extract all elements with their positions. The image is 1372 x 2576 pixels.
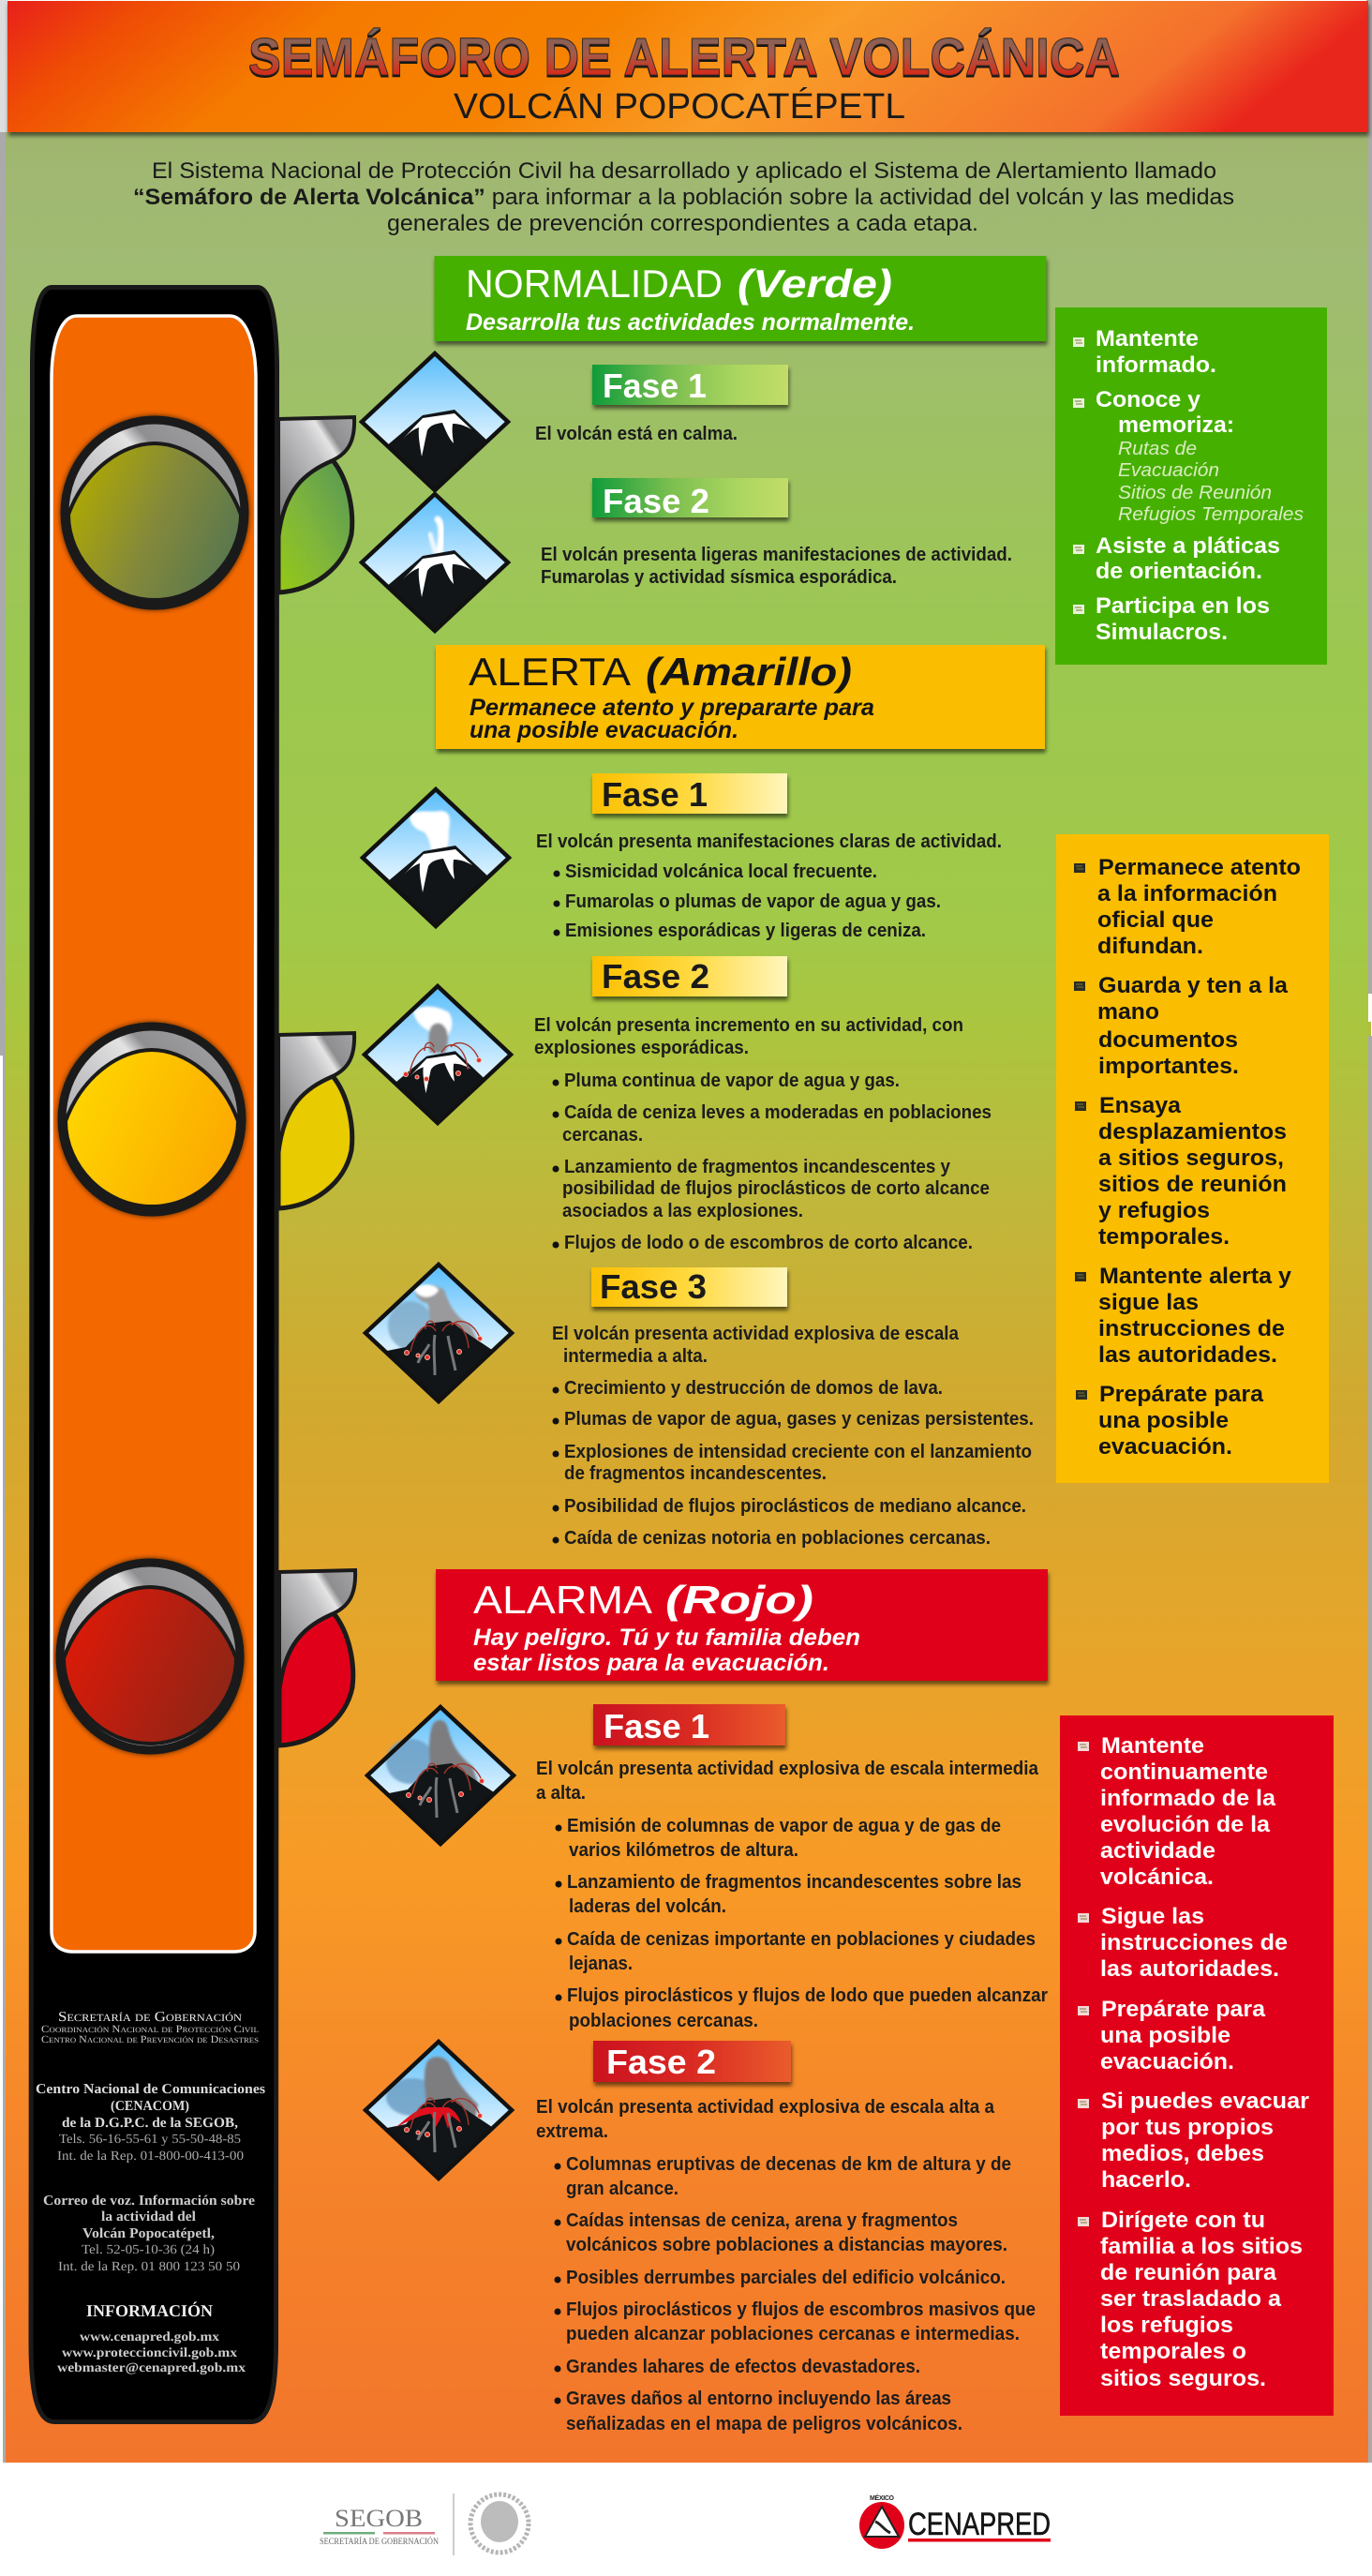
panel: NORMALIDAD heading: NORMALIDAD [466, 262, 723, 306]
logo: CENAPRED [859, 2494, 1051, 2549]
panel: red recommendations [1060, 1715, 1334, 2416]
panel: red recommendations: de reunión para [1100, 2260, 1277, 2285]
panel: red recommendations: sitios seguros. [1100, 2366, 1266, 2391]
panel: yellow recommendations [1056, 834, 1329, 1483]
contact text in traffic light base: Centro Nacional de Comunicaciones [36, 2082, 265, 2097]
panel: red recommendations: ser trasladado a [1100, 2286, 1282, 2312]
subtitle: VOLCÁN POPOCATÉPETL [454, 86, 905, 127]
text: fase 2 amarillo: Caída de ceniza leves a moderadas en poblaciones [564, 1102, 992, 1123]
text: fase 2 amarillo [534, 1015, 992, 1253]
panel: yellow recommendations: Ensaya [1099, 1093, 1182, 1118]
red lamp [60, 1563, 240, 1750]
text: fase 2 amarillo: Flujos de lodo o de escombros de corto alcance. [564, 1233, 973, 1253]
panel: red recommendations: volcánica. [1100, 1865, 1214, 1890]
Fase 1 rojo: Fase 1 [604, 1707, 709, 1745]
Fase 2 amarillo [592, 956, 787, 996]
text: fase 1 rojo: a alta. [536, 1783, 586, 1804]
panel: red recommendations: hacerlo. [1101, 2167, 1191, 2193]
panel: yellow recommendations: documentos [1098, 1027, 1238, 1053]
panel: yellow recommendations: una posible [1098, 1408, 1229, 1433]
panel: NORMALIDAD heading [435, 256, 1046, 341]
text: fase 2 verde: El volcán presenta ligeras manifestaciones de actividad. [541, 545, 1012, 565]
panel: red recommendations: continuamente [1100, 1760, 1268, 1785]
text: fase 2 amarillo: El volcán presenta incremento en su actividad, con [534, 1015, 963, 1036]
traffic light body [31, 287, 277, 2422]
text: fase 1 rojo: lejanas. [569, 1954, 633, 1974]
panel: yellow recommendations: sigue las [1098, 1290, 1199, 1315]
panel: green recommendations: Sitios de Reunión [1118, 483, 1272, 503]
panel: yellow recommendations: las autoridades. [1098, 1342, 1277, 1368]
panel: green recommendations: Rutas de [1118, 439, 1197, 459]
panel: red recommendations: evolución de la [1100, 1812, 1271, 1837]
yellow lamp [62, 1026, 242, 1212]
text: fase 3 amarillo: Crecimiento y destrucción de domos de lava. [564, 1378, 943, 1399]
text: fase 1 rojo: El volcán presenta actividad explosiva de escala intermedia [536, 1759, 1039, 1779]
Fase 1 amarillo: Fase 1 [602, 775, 708, 814]
yellow lamp visor [278, 1033, 354, 1208]
text: fase 1 rojo: Lanzamiento de fragmentos incandescentes sobre las [567, 1872, 1022, 1893]
contact text in traffic light base: Coordinación Nacional de Protección Civil [41, 2024, 259, 2035]
text: fase 3 amarillo: Caída de cenizas notoria en poblaciones cercanas. [564, 1528, 991, 1549]
contact text in traffic light base: Centro Nacional de Prevención de Desastres [41, 2034, 259, 2045]
Fase 2 amarillo: Fase 2 [602, 957, 709, 996]
text: fase 2 rojo: Posibles derrumbes parciales del edificio volcánico. [566, 2268, 1006, 2288]
panel: yellow recommendations: importantes. [1098, 1054, 1239, 1079]
panel: ALERTA heading: (Amarillo) [646, 650, 852, 694]
panel: ALARMA heading [436, 1569, 1048, 1681]
text: fase 2 rojo: Caídas intensas de ceniza, arena y fragmentos [566, 2210, 958, 2231]
text: fase 3 amarillo: Posibilidad de flujos piroclásticos de mediano alcance. [564, 1496, 1026, 1517]
text: fase 2 verde [541, 545, 1012, 588]
logo: SEGOB: SEGOB [335, 2505, 423, 2532]
panel: red recommendations: actividade [1100, 1838, 1215, 1864]
text: fase 2 rojo: El volcán presenta actividad explosiva de escala alta a [536, 2097, 995, 2118]
panel: ALARMA heading: ALARMA [473, 1578, 652, 1622]
contact text in traffic light base [36, 2010, 265, 2375]
red lamp visor [279, 1570, 355, 1745]
panel: green recommendations: Evacuación [1118, 460, 1219, 481]
panel: green recommendations: Simulacros. [1096, 620, 1228, 645]
Fase 1 amarillo [592, 773, 787, 814]
text: fase 1 rojo: Emisión de columnas de vapor de agua y de gas de [567, 1816, 1001, 1836]
text: fase 1 rojo: poblaciones cercanas. [569, 2011, 758, 2031]
icon: volcano with small fumarole, green phase 2 [362, 494, 508, 637]
contact text in traffic light base: Tels. 56-16-55-61 y 55-50-48-85 [59, 2133, 241, 2147]
Fase 2 verde [592, 478, 788, 520]
panel: yellow recommendations: y refugios [1098, 1198, 1210, 1223]
panel: yellow recommendations: instrucciones de [1098, 1316, 1285, 1341]
text: fase 2 rojo: señalizadas en el mapa de peligros volcánicos. [566, 2414, 962, 2434]
contact text in traffic light base: Volcán Popocatépetl, [82, 2226, 215, 2241]
text: fase 1 verde: El volcán está en calma. [535, 424, 738, 444]
text: fase 1 amarillo: El volcán presenta manifestaciones claras de actividad. [536, 831, 1002, 852]
panel: red recommendations: familia a los sitios [1100, 2234, 1303, 2259]
icon: national seal [470, 2494, 529, 2553]
panel: red recommendations: temporales o [1100, 2339, 1246, 2364]
text: fase 3 amarillo: de fragmentos incandescentes. [564, 1463, 827, 1484]
orange panel [52, 316, 256, 1952]
logo: CENAPRED: CENAPRED [908, 2507, 1051, 2542]
panel: yellow recommendations: oficial que [1097, 907, 1214, 933]
panel: red recommendations: las autoridades. [1100, 1956, 1279, 1982]
text: fase 2 rojo: Flujos piroclásticos y flujos de escombros masivos que [566, 2299, 1036, 2320]
text: fase 2 amarillo: explosiones esporádicas. [534, 1038, 749, 1058]
contact text in traffic light base: (CENACOM) [111, 2099, 189, 2114]
panel: yellow recommendations: difundan. [1097, 934, 1203, 959]
Fase 2 rojo [593, 2041, 791, 2082]
text: fase 3 amarillo: intermedia a alta. [563, 1346, 708, 1367]
icon: volcano with ash cloud, yellow phase 3 [365, 1265, 512, 1408]
text: fase 1 rojo: Flujos piroclásticos y flujos de lodo que pueden alcanzar [567, 1985, 1048, 2006]
panel: yellow recommendations: evacuación. [1098, 1434, 1232, 1460]
panel: green recommendations: memoriza: [1118, 412, 1234, 438]
panel: NORMALIDAD heading: Desarrolla tus actividades normalmente. [466, 309, 915, 336]
text: fase 1 rojo: varios kilómetros de altura. [569, 1840, 798, 1861]
green lamp [65, 420, 245, 606]
panel: red recommendations: Dirígete con tu [1101, 2208, 1265, 2233]
Fase 2 verde: Fase 2 [603, 482, 709, 520]
text: fase 2 amarillo: posibilidad de flujos piroclásticos de corto alcance [562, 1178, 990, 1199]
panel: green recommendations: Conoce y [1096, 387, 1201, 412]
panel: red recommendations: Sigue las [1101, 1904, 1204, 1929]
panel: red recommendations: los refugios [1100, 2313, 1233, 2338]
text: fase 2 rojo: Grandes lahares de efectos devastadores. [566, 2357, 920, 2377]
Fase 2 rojo: Fase 2 [606, 2043, 716, 2081]
text: fase 2 rojo: pueden alcanzar poblaciones cercanas e intermedias. [566, 2324, 1020, 2344]
panel: green recommendations: Refugios Temporales [1118, 504, 1304, 525]
text: fase 2 rojo: volcánicos sobre poblaciones a distancias mayores. [566, 2235, 1007, 2255]
panel: yellow recommendations: Prepárate para [1099, 1382, 1264, 1407]
panel: green recommendations: Mantente [1096, 326, 1199, 352]
icon: volcano with ash column and fragments, yellow phase 2 [365, 986, 511, 1130]
panel: yellow recommendations: Permanece atento [1098, 855, 1301, 880]
text: fase 2 amarillo: cercanas. [562, 1125, 643, 1146]
contact text in traffic light base: INFORMACIÓN [86, 2301, 213, 2320]
icon: erupting volcano, red phase 1 [367, 1707, 514, 1850]
text: fase 2 amarillo: asociados a las explosiones. [562, 1201, 803, 1221]
contact text in traffic light base: www.proteccioncivil.gob.mx [62, 2346, 237, 2360]
text: fase 2 rojo [536, 2097, 1036, 2434]
logo: SEGOB: SECRETARÍA DE GOBERNACIÓN [320, 2536, 439, 2547]
title: SEMÁFORO DE ALERTA VOLCÁNICA [248, 27, 1120, 87]
intro paragraph: “Semáforo de Alerta Volcánica” para informar a la población sobre la actividad del volcán y las medidas [133, 185, 1234, 210]
header banner [7, 1, 1368, 132]
panel: green recommendations [1055, 307, 1327, 665]
text: fase 3 amarillo: El volcán presenta actividad explosiva de escala [552, 1324, 960, 1344]
text: fase 2 amarillo: Lanzamiento de fragmentos incandescentes y [564, 1157, 951, 1177]
logo: SEGOB [320, 2494, 529, 2555]
Fase 1 verde [592, 365, 788, 405]
intro paragraph [133, 158, 1234, 236]
text: fase 2 rojo: extrema. [536, 2121, 608, 2142]
panel: ALERTA heading [436, 645, 1045, 749]
contact text in traffic light base: Correo de voz. Información sobre [43, 2194, 255, 2209]
icon: calm volcano, green phase 1 [362, 353, 508, 497]
text: fase 3 amarillo: Explosiones de intensidad creciente con el lanzamiento [564, 1442, 1032, 1462]
text: fase 2 rojo: gran alcance. [566, 2179, 679, 2199]
panel: green recommendations: Asiste a pláticas [1096, 533, 1280, 559]
panel: yellow recommendations: Guarda y ten a la [1098, 973, 1289, 998]
panel: red recommendations: una posible [1100, 2023, 1230, 2048]
panel: yellow recommendations: a sitios seguros, [1098, 1146, 1284, 1171]
panel: red recommendations: por tus propios [1101, 2115, 1274, 2140]
text: fase 1 amarillo: Fumarolas o plumas de vapor de agua y gas. [565, 891, 941, 912]
Fase 1 rojo [593, 1704, 785, 1745]
text: fase 1 amarillo: Sismicidad volcánica local frecuente. [565, 861, 877, 882]
icon: volcano with white plume, yellow phase 1 [363, 789, 509, 933]
panel: yellow recommendations: temporales. [1098, 1224, 1230, 1250]
green lamp visor [278, 417, 354, 592]
panel: ALERTA heading: ALERTA [469, 650, 631, 694]
panel: ALARMA heading: Hay peligro. Tú y tu familia deben [473, 1625, 860, 1651]
text: fase 2 amarillo: Pluma continua de vapor de agua y gas. [564, 1071, 900, 1091]
panel: ALARMA heading: estar listos para la evacuación. [473, 1650, 829, 1676]
intro paragraph: generales de prevención correspondientes a cada etapa. [387, 211, 978, 236]
text: fase 1 rojo [536, 1759, 1048, 2031]
contact text in traffic light base: de la D.G.P.C. de la SEGOB, [62, 2116, 238, 2131]
panel: red recommendations: Prepárate para [1101, 1997, 1266, 2022]
logo: CENAPRED: MÉXICO [870, 2494, 895, 2502]
panel: red recommendations: informado de la [1100, 1786, 1276, 1811]
panel: yellow recommendations: Mantente alerta y [1099, 1264, 1292, 1289]
Fase 3 amarillo: Fase 3 [600, 1267, 707, 1306]
text: fase 2 verde: Fumarolas y actividad sísmica esporádica. [541, 567, 897, 588]
icon: major eruption with lava, red phase 2 [365, 2042, 512, 2185]
text: fase 1 rojo: laderas del volcán. [569, 1896, 726, 1917]
panel: yellow recommendations: a la información [1097, 881, 1277, 906]
text: fase 3 amarillo: Plumas de vapor de agua, gases y cenizas persistentes. [564, 1409, 1034, 1430]
contact text in traffic light base: webmaster@cenapred.gob.mx [57, 2361, 246, 2375]
panel: yellow recommendations: desplazamientos [1098, 1119, 1287, 1145]
panel: green recommendations: de orientación. [1096, 559, 1262, 584]
panel: red recommendations: medios, debes [1101, 2141, 1264, 2166]
text: fase 1 amarillo: Emisiones esporádicas y ligeras de ceniza. [565, 921, 926, 941]
text: fase 3 amarillo [552, 1324, 1034, 1549]
panel: yellow recommendations: sitios de reunión [1098, 1172, 1287, 1197]
text: fase 1 amarillo [536, 831, 1002, 941]
contact text in traffic light base: Tel. 52-05-10-36 (24 h) [82, 2243, 215, 2257]
panel: red recommendations: Mantente [1101, 1733, 1204, 1759]
panel: yellow recommendations: mano [1097, 999, 1159, 1025]
intro paragraph: El Sistema Nacional de Protección Civil ha desarrollado y aplicado el Sistema de Alertamiento llamado [152, 158, 1216, 184]
Fase 1 verde: Fase 1 [603, 367, 707, 405]
panel: ALERTA heading: Permanece atento y prepararte para [470, 695, 874, 721]
panel: red recommendations: evacuación. [1100, 2049, 1234, 2074]
panel: NORMALIDAD heading: (Verde) [738, 262, 892, 306]
contact text in traffic light base: Int. de la Rep. 01 800 123 50 50 [58, 2260, 240, 2274]
panel: ALARMA heading: (Rojo) [665, 1578, 813, 1622]
panel: red recommendations: instrucciones de [1100, 1930, 1288, 1955]
contact text in traffic light base: Int. de la Rep. 01-800-00-413-00 [57, 2149, 244, 2164]
contact text in traffic light base: Secretaría de Gobernación [58, 2010, 242, 2025]
panel: red recommendations: Si puedes evacuar [1101, 2089, 1309, 2114]
panel: green recommendations: Participa en los [1096, 593, 1270, 619]
text: fase 1 rojo: Caída de cenizas importante en poblaciones y ciudades [567, 1929, 1036, 1950]
Fase 3 amarillo [591, 1267, 787, 1307]
contact text in traffic light base: www.cenapred.gob.mx [80, 2330, 219, 2344]
text: fase 2 rojo: Graves daños al entorno incluyendo las áreas [566, 2389, 951, 2409]
text: fase 2 rojo: Columnas eruptivas de decenas de km de altura y de [566, 2154, 1011, 2175]
panel: ALERTA heading: una posible evacuación. [470, 717, 738, 743]
panel: green recommendations: informado. [1096, 352, 1216, 378]
contact text in traffic light base: la actividad del [101, 2209, 196, 2224]
